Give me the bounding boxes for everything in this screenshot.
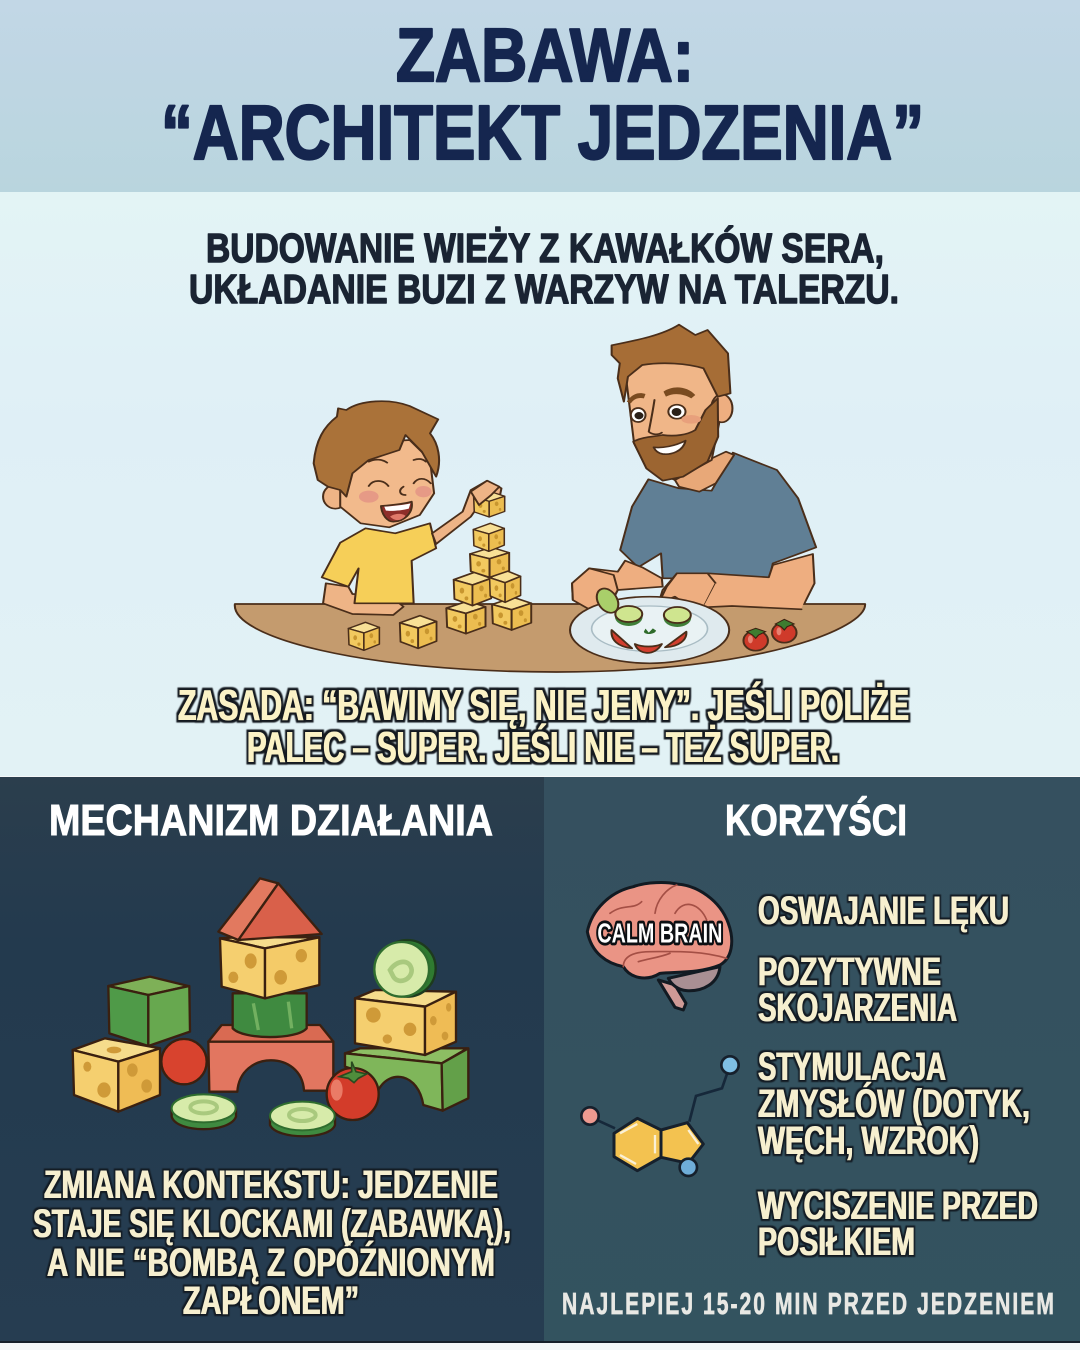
panel: mechanism (0, 777, 544, 1341)
man's hands over table (572, 568, 812, 609)
benefit 4 (758, 1184, 1038, 1264)
benefit 3 (758, 1045, 1030, 1163)
boy's ear (323, 485, 348, 509)
benefit 3: STYMULACJA (758, 1045, 946, 1089)
panel: benefits (544, 777, 1080, 1341)
table (235, 604, 865, 672)
heading: mechanism: MECHANIZM DZIAŁANIA (49, 796, 493, 845)
man's beard (633, 398, 718, 481)
man's t-shirt (620, 453, 816, 578)
cucumber slice left (172, 1094, 236, 1129)
panel bottom edge (0, 1341, 1080, 1343)
tomato slices (611, 630, 686, 653)
red roof (218, 878, 322, 940)
tomatoes (743, 619, 797, 651)
boy's mouth (381, 502, 412, 522)
mechanism description: A NIE “BOMBĄ Z OPÓŹNIONYM (47, 1239, 495, 1285)
rule text (178, 680, 909, 772)
cerebellum (668, 967, 720, 991)
atoms (581, 1107, 599, 1125)
boy's hair (314, 401, 439, 497)
boy's cheeks (359, 491, 379, 503)
left cheese block (73, 1038, 160, 1112)
boy's closed eyes (369, 459, 431, 486)
cucumber slices (593, 586, 691, 634)
benefit 2: POZYTYWNE (758, 950, 941, 994)
red arch (208, 1025, 333, 1092)
mechanism description: STAJE SIĘ KLOCKAMI (ZABAWKĄ), (33, 1202, 511, 1246)
mechanism description (33, 1163, 511, 1323)
plate with vegetable face (570, 586, 729, 663)
cerebrum (587, 882, 732, 978)
benefit 2: SKOJARZENIA (758, 986, 957, 1030)
man's eyes and brows (627, 387, 695, 403)
brain folds (610, 885, 727, 967)
title: ZABAWA: (396, 13, 694, 97)
benefits list (758, 889, 1038, 1264)
man's arms and hands (572, 561, 663, 609)
mechanism description: ZAPŁONEM” (183, 1279, 359, 1323)
man's neck (673, 452, 734, 492)
green cube (108, 977, 190, 1046)
man's ear (711, 394, 732, 422)
panel: illustration area (0, 192, 1080, 776)
man's hair (612, 325, 730, 402)
loose cheese cubes (348, 616, 437, 650)
boy's face (340, 440, 434, 527)
benefit 3: WĘCH, WZROK) (758, 1119, 979, 1163)
man's mouth (654, 441, 686, 454)
icon: serotonin molecule (581, 1056, 739, 1176)
title: “ARCHITEKT JEDZENIA” (161, 90, 924, 176)
panel: title band (0, 0, 1080, 192)
brain stem (658, 980, 686, 1010)
illustration: father and son at table (235, 325, 865, 672)
cucumber cylinder (233, 993, 307, 1037)
man (572, 325, 816, 609)
subtitle: UKŁADANIE BUZI Z WARZYW NA TALERZU. (189, 266, 899, 312)
boy's right arm and hand (432, 481, 501, 544)
big cheese block (220, 937, 319, 998)
front tomato (327, 1062, 379, 1120)
benefit 2 (758, 950, 957, 1030)
illustration: food building blocks (73, 878, 468, 1136)
brain label: CALM BRAIN (597, 918, 722, 949)
tomato behind (161, 1039, 207, 1084)
right cheese block (355, 990, 456, 1055)
mechanism description: ZMIANA KONTEKSTU: JEDZENIE (44, 1163, 498, 1207)
cucumber slice right (270, 1102, 335, 1136)
cheese cube tower (446, 481, 531, 634)
benefit 4: POSIŁKIEM (758, 1220, 915, 1264)
boy's shirt (322, 523, 436, 603)
rings (614, 1118, 661, 1171)
green arch (345, 1048, 468, 1111)
icon: calm brain (587, 882, 732, 1010)
boy's left arm (323, 583, 403, 615)
title (161, 13, 924, 176)
man's head (624, 353, 720, 480)
heading: benefits: KORZYŚCI (725, 795, 907, 845)
standing cucumber slice (374, 940, 436, 997)
subtitle (189, 225, 899, 312)
boy (314, 401, 501, 615)
subtitle: BUDOWANIE WIEŻY Z KAWAŁKÓW SERA, (206, 225, 884, 271)
